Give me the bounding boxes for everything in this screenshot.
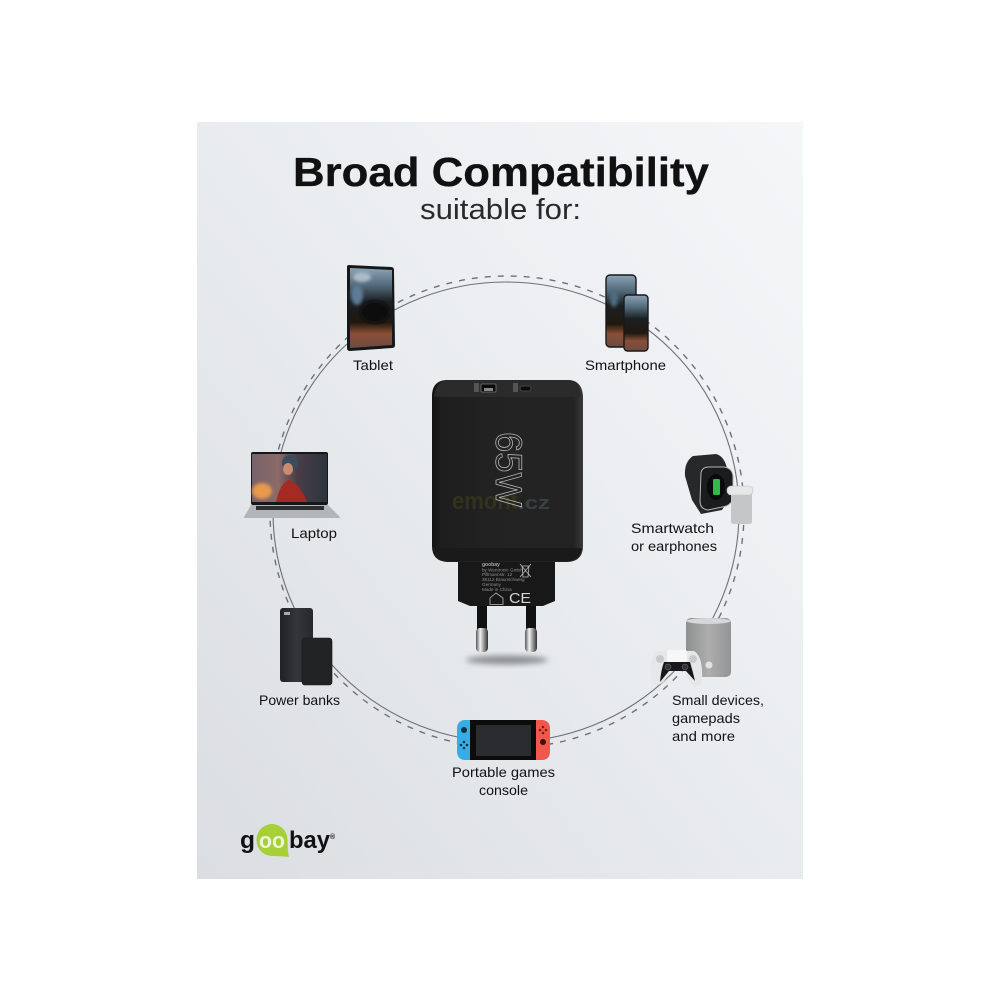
large phone — [606, 275, 636, 347]
label: Smartwatch or earphones: or earphones — [631, 538, 717, 554]
charger body — [432, 380, 583, 562]
dashed compatibility ring — [270, 276, 744, 748]
icon: gamepad — [651, 650, 702, 686]
label: Small devices, gamepads and more — [672, 692, 764, 744]
label: Smartphone: Smartphone — [585, 357, 666, 373]
icon: portable games console — [457, 720, 550, 760]
label: Smartwatch or earphones: Smartwatch — [631, 520, 714, 536]
icon: smartwatch — [685, 454, 735, 514]
logo bubble — [256, 824, 289, 857]
plug legal text: Germany — [482, 582, 502, 587]
charger floor shadow — [466, 656, 548, 664]
label: Portable games console: console — [479, 782, 528, 798]
logo: goobay — [240, 824, 336, 857]
solid compatibility ring — [273, 282, 739, 742]
large power bank — [280, 608, 313, 682]
title: Broad Compatibility — [293, 149, 709, 195]
USB-C port — [513, 383, 531, 392]
subtitle: suitable for: — [420, 194, 581, 226]
plug legal text: Pillmannstr. 12 — [482, 572, 513, 577]
wattage label: 65W — [488, 432, 529, 507]
label: Smartwatch or earphones — [631, 520, 717, 554]
charger pins — [476, 600, 537, 652]
small power bank — [302, 638, 332, 685]
label: Small devices, gamepads and more: and more — [672, 728, 735, 744]
label: Tablet: Tablet — [353, 357, 393, 373]
label: Small devices, gamepads and more: gamepads — [672, 710, 740, 726]
plug legal text: by Wentronic GmbH — [482, 568, 523, 572]
icon: charger — [432, 380, 583, 664]
CE mark: CE — [509, 590, 531, 607]
label: Small devices, gamepads and more: Small devices, — [672, 692, 764, 708]
watermark: emont — [452, 488, 518, 515]
icon: power banks — [280, 608, 332, 685]
house symbol — [490, 593, 503, 604]
logo letter g: g — [240, 827, 255, 854]
USB-A port — [474, 383, 496, 392]
label: Laptop: Laptop — [291, 525, 337, 541]
watermark: .cz — [518, 493, 550, 513]
icon: earphones case — [727, 486, 753, 524]
small phone — [624, 295, 648, 351]
label: Portable games console: Portable games — [452, 764, 555, 780]
label: Portable games console — [452, 764, 555, 798]
icon: speaker — [686, 618, 731, 677]
registered mark: ® — [330, 833, 336, 841]
icon: laptop — [244, 452, 340, 518]
logo letters bay: bay — [289, 827, 331, 854]
plug legal text: goobay — [482, 562, 500, 568]
left joy-con — [457, 720, 471, 760]
plug legal text: Made in China — [482, 587, 512, 592]
plug legal text — [482, 562, 525, 592]
charger plug base — [458, 560, 555, 606]
icon: tablet — [347, 265, 395, 351]
plug legal text: 38112 Braunschweig — [482, 577, 525, 582]
panel: background — [197, 122, 803, 879]
logo letters oo: oo — [259, 828, 285, 853]
bin symbol — [520, 564, 531, 577]
watch battery indicator — [713, 479, 720, 495]
label: Power banks: Power banks — [259, 692, 340, 708]
icon: smartphones — [606, 275, 648, 351]
right joy-con — [536, 720, 550, 760]
console body — [470, 720, 537, 760]
